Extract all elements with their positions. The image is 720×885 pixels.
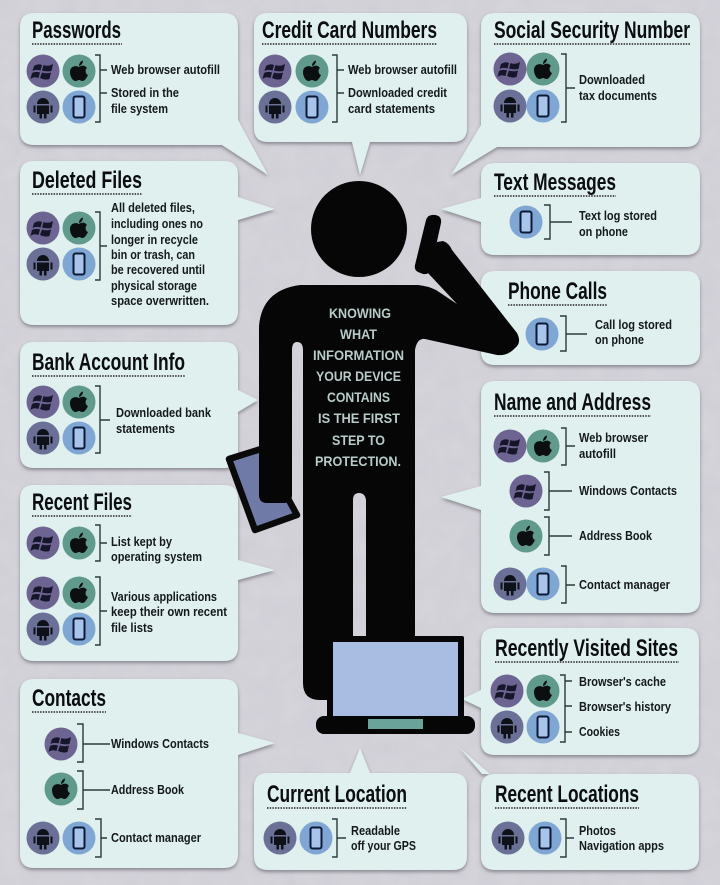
message: knowing what information: KNOWING <box>329 305 391 321</box>
panel: name and address: autofill <box>579 447 616 461</box>
panel: recent files: keep their own recent <box>111 605 228 619</box>
message: knowing what information: CONTAINS <box>327 389 390 405</box>
icon: laptop <box>316 636 475 734</box>
heading: contacts: Contacts <box>32 685 106 712</box>
panel: contacts: Windows Contacts <box>111 737 209 751</box>
panel: bank account info <box>20 342 258 468</box>
panel: bank account info: statements <box>116 422 175 436</box>
heading: bank account info: Bank Account Info <box>32 349 185 376</box>
panel: recent locations <box>460 748 699 870</box>
panel: social security number: tax documents <box>579 89 657 103</box>
head <box>311 181 407 277</box>
panel: recent files: operating system <box>111 550 202 564</box>
panel: deleted files <box>20 161 275 325</box>
panel: name and address <box>441 381 700 613</box>
panel: name and address: Address Book <box>579 529 652 543</box>
heading: text messages: Text Messages <box>494 169 616 196</box>
panel: passwords: Stored in the <box>111 86 179 100</box>
panel: bank account info: Downloaded bank <box>116 406 211 420</box>
heading: current location: Current Location <box>267 781 407 808</box>
panel: credit card numbers: card statements <box>348 102 435 116</box>
panel: passwords: file system <box>111 102 168 116</box>
panel: recently visited sites: Browser's cache <box>579 675 666 689</box>
panel: name and address: Contact manager <box>579 578 670 592</box>
panel: contacts <box>20 679 275 868</box>
heading: recent files: Recent Files <box>32 489 132 516</box>
panel: deleted files: bin or trash, can <box>111 248 195 262</box>
panel: deleted files: longer in recycle <box>111 233 198 247</box>
panel: current location: off your GPS <box>351 839 416 853</box>
panel: text messages: on phone <box>579 225 628 239</box>
panel: name and address: Web browser <box>579 431 648 445</box>
panel: social security number: Downloaded <box>579 73 645 87</box>
panel: contacts: Contact manager <box>111 831 201 845</box>
panel: phone calls: on phone <box>595 333 644 347</box>
panel: text messages <box>441 163 700 255</box>
figure: person with devices <box>229 181 519 734</box>
message: knowing what information: YOUR DEVICE <box>316 368 401 384</box>
panel: phone calls <box>481 271 700 365</box>
panel: deleted files: physical storage <box>111 279 197 293</box>
panel: credit card numbers <box>254 13 467 175</box>
panel: deleted files: All deleted files, <box>111 201 195 215</box>
panel: social security number <box>451 13 700 175</box>
panel: current location <box>254 748 467 870</box>
message: knowing what information: STEP TO <box>332 432 385 448</box>
panel: recently visited sites: Browser's history <box>579 700 671 714</box>
panel: deleted files: be recovered until <box>111 263 205 277</box>
panel: credit card numbers: Downloaded credit <box>348 86 448 100</box>
message: knowing what information: PROTECTION. <box>315 453 401 469</box>
panel: credit card numbers: Web browser autofill <box>348 63 457 77</box>
panel: recently visited sites <box>462 628 699 755</box>
panel: contacts: Address Book <box>111 783 184 797</box>
heading: passwords: Passwords <box>32 17 121 44</box>
panel: recent files: List kept by <box>111 535 172 549</box>
panel: deleted files: including ones no <box>111 217 203 231</box>
message: knowing what information: IS THE FIRST <box>318 410 400 426</box>
panel: recent locations: Navigation apps <box>579 839 664 853</box>
panel: recent files: Various applications <box>111 590 217 604</box>
panel: deleted files: space overwritten. <box>111 294 209 308</box>
heading: name and address: Name and Address <box>494 389 651 416</box>
panel: recent locations: Photos <box>579 824 616 838</box>
icon: phone at ear <box>415 215 441 274</box>
heading: deleted files: Deleted Files <box>32 167 142 194</box>
panel: recent files <box>20 485 275 661</box>
panel: passwords: Web browser autofill <box>111 63 220 77</box>
panel: name and address: Windows Contacts <box>579 484 677 498</box>
body silhouette <box>259 241 519 700</box>
heading: recent locations: Recent Locations <box>495 781 639 808</box>
message: knowing what information <box>313 305 404 469</box>
icon: tablet in hand <box>229 449 297 530</box>
panel: recent files: file lists <box>111 621 153 635</box>
heading: credit card numbers: Credit Card Numbers <box>262 17 437 44</box>
panel: recently visited sites: Cookies <box>579 725 620 739</box>
heading: phone calls: Phone Calls <box>508 278 607 305</box>
panel: current location: Readable <box>351 824 400 838</box>
panel: phone calls: Call log stored <box>595 318 672 332</box>
message: knowing what information: WHAT <box>340 326 377 342</box>
panel: passwords <box>20 13 268 175</box>
panel: text messages: Text log stored <box>579 209 657 223</box>
message: knowing what information: INFORMATION <box>313 347 404 363</box>
